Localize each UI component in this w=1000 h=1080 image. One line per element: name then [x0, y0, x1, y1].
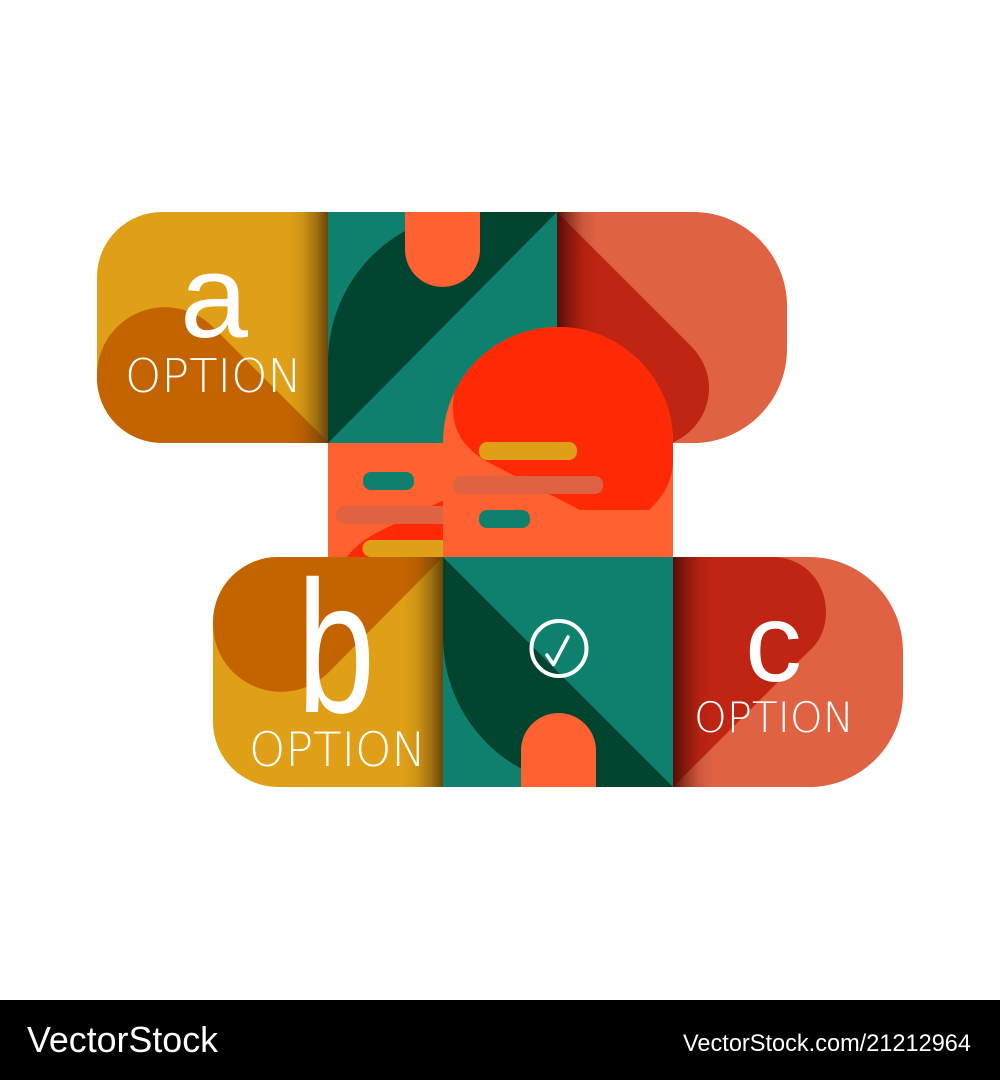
yellow bar [362, 540, 444, 557]
yellow bar [479, 442, 577, 460]
coral bar [453, 476, 603, 494]
letter c: c [745, 581, 802, 705]
footer image id: VectorStock.com/21212964 [683, 1030, 971, 1057]
label: option b: OPTION [249, 723, 426, 778]
label: option c: OPTION [694, 693, 854, 742]
panel: center right dome [443, 327, 673, 557]
red dome shape [453, 327, 673, 510]
panel: top right coral [557, 212, 787, 455]
teal bar [363, 472, 414, 490]
teal bar [479, 510, 530, 528]
panel: option c [673, 557, 903, 787]
coral bar [336, 506, 444, 524]
footer logo text: VectorStock [27, 1019, 219, 1060]
panel: center left orange block [328, 443, 444, 557]
footer bar [0, 1000, 1000, 1080]
letter b: b [297, 542, 375, 752]
panel: bottom teal square [443, 557, 673, 787]
orange pill bottom [521, 713, 596, 787]
label: option a: OPTION [125, 349, 302, 403]
panel: option b [213, 542, 443, 787]
red swoosh [347, 500, 444, 557]
orange pill top [405, 212, 480, 287]
icon: check mark in circle [532, 621, 586, 676]
letter a: a [180, 231, 248, 363]
panel: top teal square [328, 212, 558, 443]
panel: option a [97, 212, 329, 443]
